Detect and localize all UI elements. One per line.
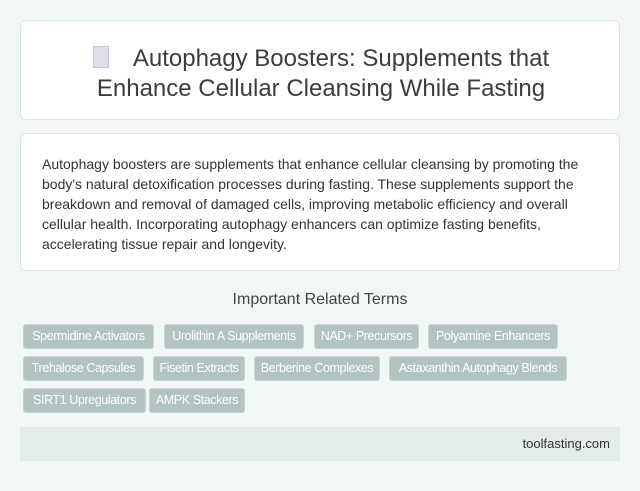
icon: document — [93, 46, 109, 68]
footer source: toolfasting.com — [523, 436, 610, 451]
tags: NAD+ Precursors — [321, 329, 412, 343]
title — [93, 45, 549, 102]
tags: Astaxanthin Autophagy Blends — [399, 361, 557, 375]
tags: Polyamine Enhancers — [436, 329, 550, 343]
tags: Trehalose Capsules — [32, 361, 135, 375]
tags: Urolithin A Supplements — [172, 329, 296, 343]
tags: Fisetin Extracts — [159, 361, 239, 375]
section heading: Important Related Terms — [233, 291, 407, 308]
tags: Berberine Complexes — [261, 361, 373, 375]
description text: Autophagy boosters are supplements that enhance cellular cleansing by promoting the body's natural detoxification processes during fasting. These supplements support the breakdown and removal of damaged cells, improving metabolic efficiency and overall cellular health. Incorporating autophagy enhancers can optimize fasting benefits, accelerating tissue repair and longevity. — [42, 156, 578, 252]
tags: SIRT1 Upregulators — [33, 393, 136, 407]
tags: AMPK Stackers — [156, 393, 238, 407]
description card — [20, 133, 620, 271]
title: Autophagy Boosters: Supplements that — [133, 45, 549, 72]
tags: Spermidine Activators — [32, 329, 145, 343]
header card — [20, 20, 620, 120]
title: Enhance Cellular Cleansing While Fasting — [97, 75, 545, 102]
footer — [20, 427, 620, 461]
